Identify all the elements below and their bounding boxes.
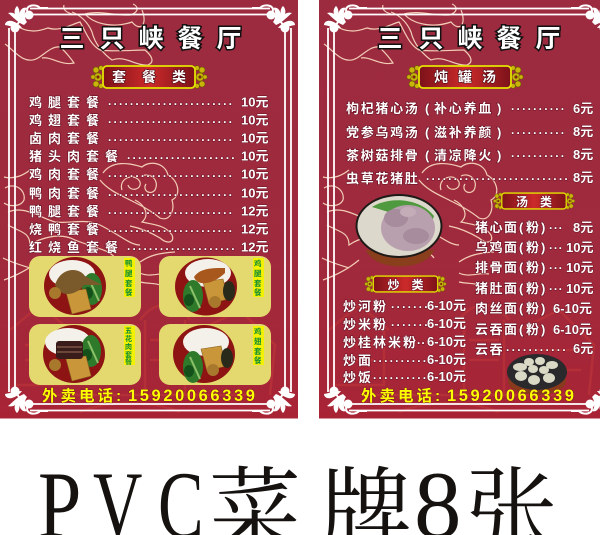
noodle soups price list: 6-10元 xyxy=(553,301,592,316)
set meals price list: ....................... xyxy=(108,185,234,199)
set meals price list: 10元 xyxy=(241,112,268,128)
set meals price list: 10元 xyxy=(241,186,268,200)
food card: duck leg set: 鸭 xyxy=(125,258,133,268)
stir-fry price list xyxy=(343,297,466,385)
panel: soups and stir-fry menu xyxy=(319,0,600,418)
noodle soups price list: ) xyxy=(541,260,545,275)
stewed soup price list: 茶树菇排骨 xyxy=(346,148,420,163)
food card: duck leg set xyxy=(29,256,141,317)
stir-fry price list: 炒桂林米粉 xyxy=(343,335,418,350)
set meals price list: 鸡肉套餐 xyxy=(29,167,105,182)
set meals price list: .................... xyxy=(127,148,237,162)
delivery phone: 15920066339 xyxy=(447,387,577,405)
noodle soups price list: 粉 xyxy=(526,240,539,255)
stewed soup price list: 8元 xyxy=(573,170,593,185)
title: 只 xyxy=(99,19,125,55)
noodle soups price list: ( xyxy=(519,322,524,337)
noodle soups price list: 粉 xyxy=(526,301,539,316)
noodle soups price list: 6元 xyxy=(573,341,593,356)
noodle soups price list: ) xyxy=(541,240,545,255)
food card: pork belly set: 餐 xyxy=(125,357,132,366)
illustration: dumpling bowl xyxy=(507,354,567,395)
food card: chicken wing set: 翅 xyxy=(254,336,262,346)
title: 厅 xyxy=(216,19,242,55)
noodle soups price list: 肉丝面 xyxy=(475,301,519,316)
noodle soups price list: ) xyxy=(541,220,545,235)
food card: pork belly set: 五 xyxy=(125,327,132,335)
noodle soups price list: 10元 xyxy=(566,260,593,275)
set meals price list: 10元 xyxy=(241,148,268,164)
stewed soup price list: 虫草花猪肚 xyxy=(346,171,420,186)
delivery phone xyxy=(361,386,577,405)
noodle soups price list: ( xyxy=(519,220,524,235)
food card: chicken leg set: 腿 xyxy=(254,269,262,278)
stewed soup price list: 补心养血 xyxy=(434,101,493,116)
food card: chicken leg set: 鸡 xyxy=(254,258,262,268)
set meals price list: 10元 xyxy=(241,130,268,146)
noodle soups price list: 10元 xyxy=(566,281,593,296)
set meals price list: 10元 xyxy=(241,166,268,182)
set meals price list: ....................... xyxy=(108,221,234,235)
stewed soup price list: .......... xyxy=(511,99,566,113)
title: 峡 xyxy=(138,19,164,55)
noodle soups price list: 猪心面 xyxy=(475,220,519,235)
set meals price list: 鸭肉套餐 xyxy=(29,186,105,201)
stewed soup price list: ( xyxy=(425,148,430,163)
set meals price list: 12元 xyxy=(241,204,268,218)
stir-fry price list: 炒饭 xyxy=(343,370,373,385)
stewed soup price list: 党参乌鸡汤 xyxy=(346,125,420,140)
heading banner: stir-fry: 炒类 xyxy=(387,277,436,292)
food card: chicken leg set xyxy=(159,256,271,317)
stewed soup price list: ) xyxy=(497,125,501,140)
stewed soup price list: ( xyxy=(425,125,430,140)
noodle soups price list: ( xyxy=(519,301,524,316)
noodle soups price list: 云吞面 xyxy=(475,322,519,337)
stewed soup price list xyxy=(346,99,593,186)
heading banner: stewed soup xyxy=(407,66,523,88)
noodle soups price list: 10元 xyxy=(566,240,593,255)
stewed soup price list: 8元 xyxy=(573,124,593,139)
food card: chicken wing set: 餐 xyxy=(254,355,262,365)
set meals price list: 烧鸭套餐 xyxy=(29,222,105,237)
set meals price list: 红烧鱼套餐 xyxy=(29,240,124,255)
noodle soups price list: 乌鸡面 xyxy=(475,240,519,255)
stewed soup price list: 滋补养颜 xyxy=(434,125,493,140)
set meals price list: ....................... xyxy=(108,112,234,126)
stir-fry price list: 6-10元 xyxy=(427,334,466,349)
delivery phone: 外卖电话: xyxy=(361,386,443,405)
stewed soup price list: ) xyxy=(497,101,501,116)
set meals price list: .................... xyxy=(127,239,237,253)
title: 厅 xyxy=(535,19,561,55)
title: 只 xyxy=(418,19,444,55)
noodle soups price list: 粉 xyxy=(526,260,539,275)
stir-fry price list: .. xyxy=(417,333,426,347)
set meals price list: ....................... xyxy=(108,94,234,108)
set meals price list: 鸡翅套餐 xyxy=(29,113,105,128)
noodle soups price list: ) xyxy=(541,301,545,316)
stir-fry price list: 炒米粉 xyxy=(343,317,388,332)
food card: duck leg set: 套 xyxy=(125,278,133,288)
heading banner: set meals: 套餐类 xyxy=(112,69,202,85)
food card: duck leg set: 腿 xyxy=(125,269,133,278)
stewed soup price list: 枸杞猪心汤 xyxy=(346,101,420,116)
noodle soups price list: ) xyxy=(541,281,545,296)
stir-fry price list: .......... xyxy=(373,368,428,382)
heading banner: stir-fry xyxy=(365,276,446,292)
noodle soups price list: ( xyxy=(519,281,524,296)
delivery phone: 15920066339 xyxy=(128,387,258,405)
stir-fry price list: 炒河粉 xyxy=(343,299,388,314)
title: 峡 xyxy=(457,19,483,55)
stewed soup price list: 清凉降火 xyxy=(434,148,493,163)
heading banner: noodle soups: 汤类 xyxy=(516,194,564,209)
noodle soups price list: 猪肚面 xyxy=(475,281,519,296)
stir-fry price list: 炒面 xyxy=(343,353,373,368)
set meals price list: 12元 xyxy=(241,240,268,254)
set meals price list: 鸡腿套餐 xyxy=(29,95,105,110)
title xyxy=(59,19,242,55)
noodle soups price list: 粉 xyxy=(526,220,539,235)
noodle soups price list: 粉 xyxy=(526,281,539,296)
food card: pork belly set: 套 xyxy=(125,350,132,359)
noodle soups price list: ( xyxy=(519,240,524,255)
food card: pork belly set: 肉 xyxy=(125,342,132,351)
stir-fry price list: 6-10元 xyxy=(427,352,466,367)
delivery phone xyxy=(42,386,258,405)
stir-fry price list: 6-10元 xyxy=(427,298,466,313)
stewed soup price list: .......... xyxy=(511,146,566,160)
title: 餐 xyxy=(496,19,522,55)
noodle soups price list: ........... xyxy=(506,340,568,354)
set meals price list: ....................... xyxy=(108,203,234,217)
noodle soups price list: ... xyxy=(549,218,564,232)
heading banner: noodle soups xyxy=(493,193,575,209)
title: 三 xyxy=(59,19,85,55)
noodle soups price list: ) xyxy=(541,322,545,337)
set meals price list: 卤肉套餐 xyxy=(29,131,105,146)
noodle soups price list: 排骨面 xyxy=(475,260,519,275)
noodle soups price list: 云吞 xyxy=(475,342,504,357)
food card: pork belly set xyxy=(29,324,141,385)
noodle soups price list: ... xyxy=(549,238,564,252)
noodle soups price list: ... xyxy=(549,258,564,272)
noodle soups price list: ( xyxy=(519,260,524,275)
title xyxy=(377,19,561,55)
title: 餐 xyxy=(177,19,203,55)
food card: chicken wing set: 鸡 xyxy=(254,326,262,336)
stir-fry price list: 6-10元 xyxy=(427,369,466,384)
stewed soup price list: .......................... xyxy=(426,169,570,183)
stir-fry price list: ....... xyxy=(391,315,430,329)
food card: chicken leg set: 餐 xyxy=(254,287,262,297)
set meals price list: 10元 xyxy=(241,94,268,110)
set meals price list: ....................... xyxy=(108,166,234,180)
stir-fry price list: .......... xyxy=(373,351,428,365)
delivery phone: 外卖电话: xyxy=(42,386,124,405)
noodle soups price list: ... xyxy=(549,279,564,293)
noodle soups price list: 8元 xyxy=(573,220,593,235)
heading banner: set meals xyxy=(91,66,207,88)
food card: duck leg set: 餐 xyxy=(125,287,133,297)
food card: chicken leg set: 套 xyxy=(254,278,262,288)
stewed soup price list: .......... xyxy=(511,123,566,137)
stewed soup price list: 8元 xyxy=(573,147,593,162)
stir-fry price list: 6-10元 xyxy=(427,316,466,331)
set meals price list xyxy=(29,94,268,255)
noodle soups price list: 粉 xyxy=(526,322,539,337)
illustration: soup bowl xyxy=(356,194,442,266)
food card: chicken wing set: 套 xyxy=(254,346,262,356)
decorative frame xyxy=(324,5,600,414)
panel: set meals menu xyxy=(0,0,298,418)
food card: chicken wing set xyxy=(159,324,271,385)
food card: pork belly set: 花 xyxy=(125,334,132,343)
set meals price list: 12元 xyxy=(241,222,268,236)
heading banner: stewed soup: 炖罐汤 xyxy=(434,69,506,85)
set meals price list: ....................... xyxy=(108,130,234,144)
caption: PVC menu 8 sheets xyxy=(38,438,558,535)
set meals price list: 猪头肉套餐 xyxy=(29,149,124,164)
title: 三 xyxy=(377,19,403,55)
stewed soup price list: ) xyxy=(497,148,501,163)
stewed soup price list: 6元 xyxy=(573,101,593,116)
stir-fry price list: ....... xyxy=(391,297,430,311)
set meals price list: 鸭腿套餐 xyxy=(29,204,105,219)
stewed soup price list: ( xyxy=(425,101,430,116)
noodle soups price list xyxy=(475,218,593,357)
decorative frame xyxy=(5,5,295,414)
noodle soups price list: 6-10元 xyxy=(553,322,592,337)
